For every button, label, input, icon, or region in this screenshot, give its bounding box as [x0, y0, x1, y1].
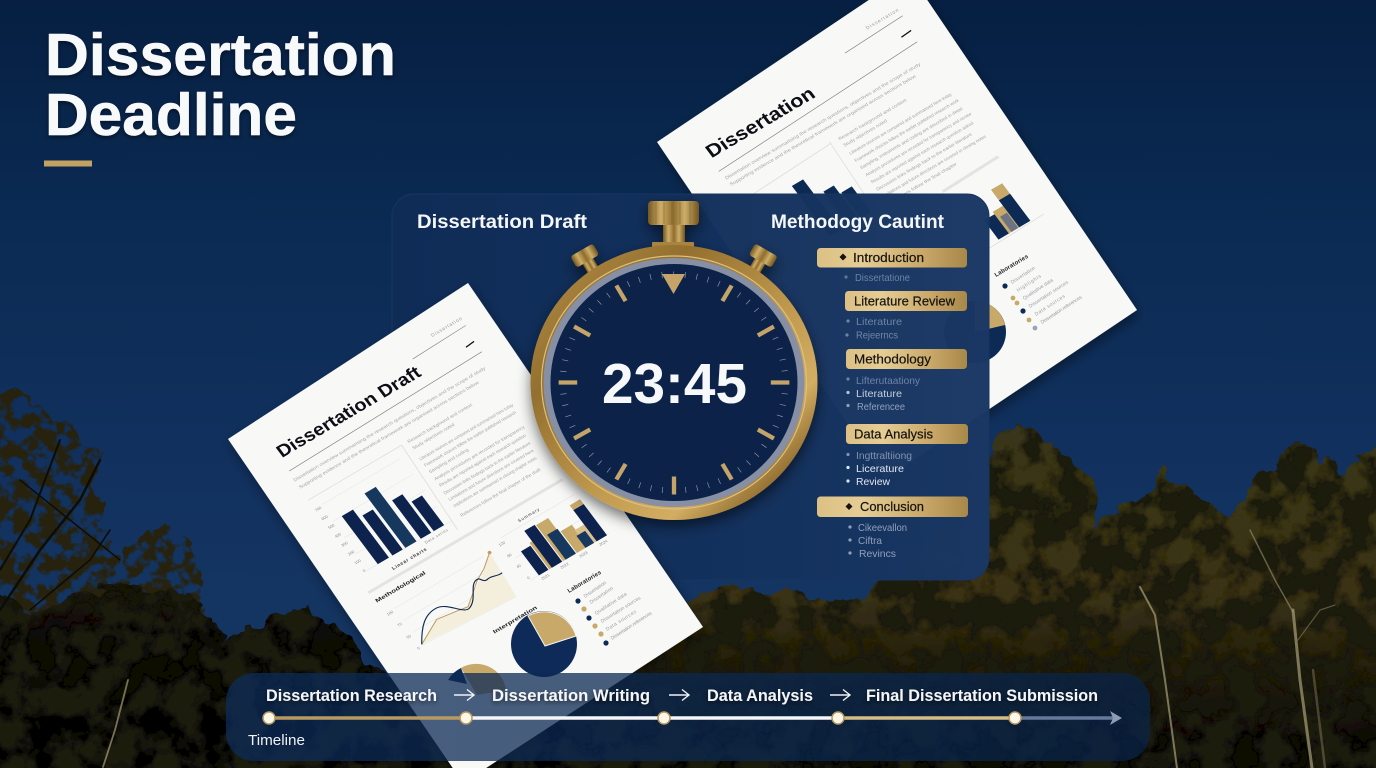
- section: literature review: Literature Review: [854, 294, 956, 308]
- bar chart: grouped navy and gold: 2021: [540, 572, 551, 581]
- back page body text: Results are reported against each research question asked: [870, 120, 975, 184]
- back page body text: Analysis procedures are recorded for transparency and review: [864, 111, 973, 177]
- back page bar chart: [792, 92, 1045, 310]
- section: conclusion: Revincs: [859, 548, 896, 560]
- section: literature review: Literature: [856, 316, 902, 328]
- section: introduction: Introduction: [853, 250, 924, 265]
- back page legend: Dissertation references: [1040, 294, 1084, 326]
- section: data analysis: Review: [856, 476, 890, 488]
- front page body text: Study objectives noted: [411, 422, 456, 450]
- bar chart: grouped navy and gold: 80: [506, 552, 513, 558]
- front page title: Dissertation Draft: [272, 362, 425, 461]
- back page legend: Dissertation sources: [1028, 279, 1070, 310]
- section: methodology: Methodology: [854, 352, 932, 366]
- section: methodology: [846, 349, 967, 413]
- bar chart: grouped navy and gold: 2023: [578, 550, 589, 559]
- timeline stage labels: Final Dissertation Submission: [866, 686, 1098, 705]
- bar chart: draft results: 400: [333, 531, 343, 539]
- front page legend: Dissertation sources: [600, 595, 642, 625]
- front page body text: Sampling and coding: [428, 447, 470, 474]
- section: data analysis: Data Analysis: [854, 426, 933, 442]
- back page body text: Research background and context: [837, 97, 908, 141]
- front page body text: Research background and context: [406, 402, 474, 444]
- front page body text: Implications are summarised in closing chapter notes: [452, 455, 538, 508]
- back page body text: [724, 56, 995, 264]
- bar chart: draft results: 500: [327, 522, 336, 530]
- arrow: writing to analysis: [669, 690, 689, 700]
- stopwatch dial: [550, 264, 798, 501]
- bar chart: grouped navy and gold: [491, 486, 614, 588]
- back page content: Dissertation: [865, 8, 900, 31]
- timeline stage labels: Data Analysis: [707, 686, 813, 705]
- front page body text: Results are reported against each research question: [438, 433, 527, 488]
- timeline milestones: [263, 712, 1021, 724]
- front page legend: Qualitative data: [594, 591, 628, 617]
- back page legend: Data sources: [1034, 293, 1067, 318]
- stopwatch pointer: [662, 274, 685, 294]
- section: conclusion: [817, 496, 968, 560]
- line chart: methodological trend: 75: [396, 621, 404, 628]
- panel heading: dissertation draft: Dissertation Draft: [417, 211, 588, 233]
- section: literature review: [845, 291, 967, 342]
- front page body text: Framework choices follow the earlier published research: [423, 410, 518, 468]
- bar chart: grouped navy and gold: 120: [497, 539, 507, 547]
- bar chart: draft results: 600: [320, 514, 330, 521]
- bar chart: draft results: 0: [362, 568, 367, 573]
- front page body text: Discussion links findings back to the earlier literature: [442, 440, 532, 495]
- back page title: Dissertation: [702, 84, 820, 162]
- bar chart: draft results: 100: [353, 558, 363, 565]
- stopwatch left button: [570, 243, 606, 279]
- back page pie chart: [944, 301, 1006, 363]
- arrow: research to writing: [454, 690, 474, 700]
- section: conclusion: Ciftra: [858, 535, 882, 547]
- arrow: analysis to submission: [830, 690, 850, 700]
- section: conclusion: Cikeevallon: [858, 522, 907, 534]
- stopwatch ticks: [559, 274, 789, 494]
- bar chart: grouped navy and gold: 0: [526, 575, 531, 580]
- front page body text: [292, 365, 557, 575]
- document: dissertation page (back right): [657, 0, 1137, 479]
- front page body text: References follow the final chapter of the draft: [459, 467, 542, 518]
- front page legend: Dissertation: [589, 585, 615, 606]
- back page body text: Literature sources are compared and summarised here today: [848, 91, 953, 156]
- bar chart: draft results: Linear charts: [391, 547, 428, 572]
- countdown time: 23:45: [602, 352, 747, 416]
- section: conclusion: Conclusion: [860, 499, 924, 514]
- front page body text: Literature sources are compared and summarised here today: [418, 402, 515, 461]
- bar chart: grouped navy and gold: 40: [515, 562, 523, 569]
- bar chart: grouped navy and gold: 2022: [559, 561, 570, 570]
- outline list: [817, 248, 968, 560]
- section: literature review: Rejeerncs: [856, 330, 898, 342]
- front page pie chart: [511, 611, 577, 677]
- front page body text: Analysis procedures are recorded for transparency: [433, 424, 526, 481]
- timeline stage labels: Dissertation Writing: [492, 686, 650, 705]
- label: interpretation: Interpretation: [492, 605, 540, 635]
- back page legend: Qualitative data: [1022, 277, 1055, 302]
- front page body text: Limitations and future directions are covered here: [447, 448, 535, 502]
- title accent bar: [44, 160, 92, 166]
- back page legend: [994, 254, 1084, 330]
- bar chart: draft results: Data series: [424, 527, 449, 545]
- section: methodology: Literature: [856, 388, 902, 400]
- section: methodology: Referencee: [857, 401, 905, 413]
- back page body text: References follow the final chapter: [886, 161, 958, 206]
- back page legend: Laboratories: [994, 254, 1030, 279]
- timeline stage labels: [266, 686, 1098, 705]
- timeline track: [269, 711, 1122, 725]
- bar chart: draft results: 700: [314, 505, 323, 512]
- front page content: Dissertation: [430, 316, 464, 339]
- stopwatch case: [530, 245, 818, 520]
- timeline stage labels: Dissertation Research: [266, 686, 437, 705]
- section: data analysis: Licerature: [856, 463, 904, 475]
- back page body text: Study objectives noted: [842, 118, 889, 148]
- panel heading: methodology: Methodogy Cautint: [771, 211, 944, 233]
- document: dissertation draft page (front left): [228, 283, 703, 768]
- front page lower pie chart: [448, 664, 506, 695]
- panel: main glass panel: [392, 194, 989, 580]
- icon: gold stopwatch: [530, 201, 818, 520]
- section: introduction: Dissertatione: [855, 272, 910, 284]
- front page body text: Dissertation overview summarising the research questions, objectives and the scope of study: [292, 365, 487, 482]
- front page legend: Dissertation: [583, 580, 608, 600]
- bar chart: grouped navy and gold: 2024: [598, 538, 609, 547]
- bar chart: draft results: 200: [347, 549, 356, 556]
- background: treeline: [0, 390, 1376, 768]
- page title: [45, 22, 396, 148]
- bar chart: draft results: [314, 456, 460, 585]
- back page legend: Dissertation: [1010, 265, 1037, 286]
- front page legend: [567, 570, 654, 646]
- front page legend: Laboratories: [567, 570, 603, 595]
- page title: Dissertation: [45, 22, 396, 88]
- back page body text: Framework choices follow the earlier published research work: [854, 98, 960, 163]
- bar chart: draft results: 300: [340, 540, 349, 548]
- section: data analysis: Ingttraltiiong: [856, 450, 912, 462]
- page title: Deadline: [45, 82, 297, 148]
- section: introduction: [817, 248, 967, 284]
- line chart: methodological trend: [374, 537, 522, 656]
- back page body text: Supporting evidence and the theoretical framework are organised across sections below: [729, 73, 918, 187]
- front page legend: Dissertation references: [610, 610, 654, 642]
- line chart: methodological trend: 100: [386, 609, 395, 617]
- stopwatch right button: [742, 243, 778, 279]
- stopwatch crown: [648, 201, 699, 247]
- back page body text: Limitations and future directions are covered in closing notes: [881, 134, 988, 199]
- line chart: methodological trend: Methodological: [374, 570, 428, 604]
- back page legend: Highlights: [1016, 273, 1043, 294]
- front page body text: Supporting evidence and the theoretical framework are organised across sections below: [298, 380, 481, 490]
- front page content: [252, 316, 637, 674]
- bar chart: grouped navy and gold: Summary: [517, 507, 541, 523]
- section: methodology: Lifterutaationy: [856, 375, 921, 387]
- line chart: methodological trend: 0: [416, 645, 422, 651]
- front page legend: Data sources: [605, 609, 638, 633]
- section: data analysis: [846, 424, 968, 488]
- back page body text: Discussion links findings back to the earlier literature: [875, 132, 973, 192]
- back page content: [686, 8, 1050, 336]
- timeline caption: Timeline: [248, 733, 305, 749]
- back page body text: Sampling, instruments and coding are described in detail: [859, 106, 964, 170]
- line chart: methodological trend: 50: [405, 633, 413, 640]
- panel: timeline: [226, 673, 1150, 761]
- back page body text: Dissertation overview summarising the research questions, objectives and the scope of study: [724, 61, 922, 180]
